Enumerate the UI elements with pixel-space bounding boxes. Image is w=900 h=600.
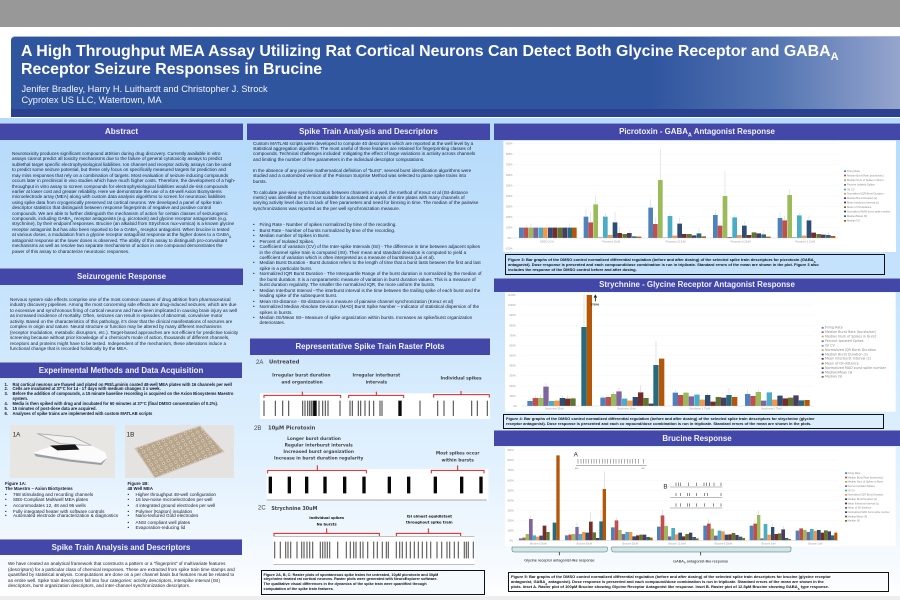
panel 2B: picrotoxin raster: Increased burst organization xyxy=(283,449,354,455)
caption: figure 5: Figure 5: Bar graphs of the DMSO control normalized differential regulation (before and after dosing) of the selected spike train descriptors for brucine (glycine receptor xyxy=(511,574,831,579)
legend: strychnine: Mean Interburst Interval (s) xyxy=(825,357,871,361)
chart: strychnine bars: 500% xyxy=(509,355,516,358)
panel 2A: untreated raster: and organization xyxy=(281,380,323,386)
chart: picrotoxin bars: 300% xyxy=(506,205,513,208)
text: figure 1A description xyxy=(5,480,118,518)
inset B raster xyxy=(663,483,722,508)
heading: brucine: Brucine Response xyxy=(662,434,732,443)
legend: brucine: Median Num of Spikes in Burst xyxy=(848,480,883,484)
caption: figure 3: antagonist). Dose response is presented and each compound/dose combination is run in triplicate. Standard errors of the mean are shown in the plot. Figure 3 also xyxy=(508,262,819,266)
legend: brucine: Mean of ISI-distance xyxy=(848,506,872,510)
legend: brucine: Median Burst Rate (bursts/sec) xyxy=(848,475,883,479)
text: abstract: using spike data from cryogenically preserved rat cortical neurons. We developed a panel of spike train xyxy=(12,200,222,205)
legend: brucine: ISI CV xyxy=(848,488,855,492)
text: descriptor definitions: • xyxy=(253,260,255,265)
legend: brucine xyxy=(845,471,890,523)
panel 2C: strychnine raster: ISI almost equidistant xyxy=(407,514,452,518)
legend: strychnine: Median ISI xyxy=(825,375,842,379)
text: descriptor definitions: varying activity level due to its lack of free parameters and need for binning in time. The median of the pairwise xyxy=(253,200,478,205)
chart: brucine bars: 900% xyxy=(507,449,514,452)
legend: picrotoxin: Mean Interburst Interval (s) xyxy=(847,200,879,204)
list: methods steps: 4. xyxy=(4,401,8,406)
chart: brucine bars: 500% xyxy=(507,489,514,492)
text: descriptor definitions: studied and a customized version of the Poisson Surprise Method was selected to parse spike trains into xyxy=(253,173,466,178)
text: descriptor definitions: leading spike of the subsequent burst. xyxy=(260,293,337,298)
list: methods steps: Cells are incubated at 37°C for 14 - 17 days with medium changes 3 x week. xyxy=(12,386,161,391)
text: figure 1A description: Fully integrated heater with software controls xyxy=(13,508,104,514)
panel 2A: untreated raster: Irregular burst duration xyxy=(272,373,331,379)
chart: strychnine bars: 200% xyxy=(509,385,516,388)
chart: strychnine bars: 800% xyxy=(509,324,516,327)
text: descriptor definitions: the burst duration. It is a nonparametric measure of variation in burst duration values. This is a measure of xyxy=(260,277,476,282)
legend: brucine: Normalized MAD burst spike number xyxy=(848,510,890,514)
text: figure 1B description: • xyxy=(128,525,129,530)
text: descriptor definitions: Coefficient of variation (CV) of the Inter-spike Intervals (ISI) - The difference in time between adjacent spikes xyxy=(260,244,480,249)
text: descriptor definitions: • xyxy=(253,222,255,227)
text: descriptor definitions: burst duration regularity. The smaller the normalized IQR, the more uniform the bursts. xyxy=(260,282,435,287)
text: descriptor definitions: • xyxy=(253,244,255,249)
text: descriptor definitions: Median number of Spikes in Burst. xyxy=(260,233,330,238)
chart: strychnine bars: Strychnine 0.75uM xyxy=(761,408,782,411)
legend: strychnine: Normalized IQR Burst Duration xyxy=(825,348,876,352)
text: descriptor definitions: Mean ISI-distance - ISI-distance is a measure of pairwise channel synchronization (Kreuz et al) xyxy=(260,299,453,304)
text: descriptor definitions: in the channel spike train is computed (ISI). Their mean and standard deviation is computed to yield a xyxy=(260,250,466,255)
text: descriptor definitions: • xyxy=(253,315,255,320)
text: abstract: antagonist response at the lower doses is observed. The ability of this assay to distinguish pro-convulsant xyxy=(12,238,227,243)
legend: strychnine: Firing Rate xyxy=(825,326,843,330)
text: figure 1B description: ANSI compliant well plates xyxy=(136,520,190,524)
text: abstract: compounds, including GABAA receptor antagonists (e.g. picrotoxin) and glycine receptor antagonists (e.g. xyxy=(12,216,227,223)
chart: brucine bars: 300% xyxy=(507,509,514,512)
poster title: Receptor Seizure Responses in Brucine xyxy=(21,61,322,78)
chart: brucine bars: Brucine 25uM xyxy=(623,542,638,545)
top grey band xyxy=(0,0,900,27)
heading: spike train analysis middle xyxy=(247,124,490,140)
background: light blue gradient xyxy=(0,118,900,596)
text: figure 1B description: 48 Well MEA xyxy=(128,486,153,490)
panel 2B: picrotoxin raster: Most spikes occur xyxy=(436,451,480,457)
text: descriptor definitions: spike in a particular burst. xyxy=(260,266,312,271)
text: descriptor definitions: deteriorates. xyxy=(260,320,285,325)
text: spike train analysis left: We have created an analytical framework that constructs a pattern or a "fingerprint" of multivariate features xyxy=(8,561,225,566)
legend: picrotoxin xyxy=(844,169,891,223)
text: figure 1B description: • xyxy=(128,508,129,514)
text: figure 1B description: 4 integrated ground electrodes per well xyxy=(136,502,215,508)
caption: figure 2: The qualitative visual differences in the dynamics of the spike train were quantified through xyxy=(264,582,427,586)
chart: strychnine bars: 1000% xyxy=(508,304,517,307)
text: figure 1B description: Figure 1B: xyxy=(128,480,149,486)
text: figure 1A description: • xyxy=(5,497,7,502)
legend: strychnine: Percent Isolated Spikes xyxy=(825,339,864,343)
text: seizurogenic response: (receptor modulation, metabolic disruptors, etc.). Target-based approaches are not efficient for predictive toxicity xyxy=(10,330,238,335)
chart: picrotoxin bars: 600% xyxy=(506,174,513,177)
heading: strychnine xyxy=(494,279,900,292)
image: 48 well MEA plate 1B: 1B xyxy=(127,432,134,439)
heading: picrotoxin xyxy=(494,124,900,140)
text: descriptor definitions: coefficient of variation which is often interpreted as a measure of burstiness (Lai et al). xyxy=(260,255,435,260)
text: figure 1A description: Accommodates 12, 48 and 96 wells xyxy=(13,502,86,508)
inset A raster: 420 xyxy=(641,468,646,470)
caption: figure 2: strychnine treated rat cortical neurons. Raster plots were generated with NeuroExplorer software. xyxy=(264,577,438,581)
caption: figure 4: Figure 4: Bar graphs of the DMSO control normalized differential regulation (before and after dosing) of the selected spike train descriptors for strychnine (glycine xyxy=(506,416,814,421)
caption: figure 2: computation of the spike train features. xyxy=(264,587,334,591)
legend: strychnine: Median Burst Rate (bursts/sec) xyxy=(825,330,877,334)
text: figure 1A description: • xyxy=(5,502,7,508)
text: seizurogenic response: activity. Based on the characteristics of this pathology, it's clear that the clinical manifestations of seizures are xyxy=(10,319,232,324)
caption: figure 5: antagonist, GABAA antagonist). Dose response is presented and each compound/dose combination is run in triplicate. Standard errors of the mean are shown in the xyxy=(511,579,824,586)
chart: brucine bars: 700% xyxy=(507,469,514,472)
legend: picrotoxin: Median Burst Rate (bursts/sec) xyxy=(847,173,884,177)
caption: figure 2: Figure 2A, B, C: Raster plots of spontaneous spike trains for untreated, 10µM picrotoxin and 30µM xyxy=(264,572,438,576)
text: abstract: earlier at lower cost and greater reliability. Here we demonstrate the use of a 48-well Axion BioSystems xyxy=(12,189,222,194)
chart: brucine bars: 400% xyxy=(507,499,514,502)
text: seizurogenic response: industry discovery pipelines. Among the most concerning side effects are drug-induced seizures, which are due xyxy=(10,302,236,307)
chart: brucine bars: Brucine 6.25uM xyxy=(715,542,732,545)
caption: figure 5: plots. Inset A. Raster plot of 100µM Brucine showing Glycine Receptor Antagonist like response. Inset B. Raster plot of 12.5µM Brucine showing GABAA type response. xyxy=(511,584,829,591)
panel 2A: untreated raster xyxy=(256,360,490,419)
image: 48 well MEA plate 1B xyxy=(125,425,234,478)
title banner xyxy=(11,36,900,116)
heading: picrotoxin: Picrotoxin - GABAA Antagonist Response xyxy=(619,127,775,139)
legend: picrotoxin: ISI CV xyxy=(847,187,855,191)
panel 2B: picrotoxin raster: Increase in burst duration regularity xyxy=(274,456,363,462)
legend: picrotoxin: Firing Rate xyxy=(847,169,861,173)
text: descriptor definitions xyxy=(253,140,482,325)
legend: picrotoxin: Median ISI xyxy=(847,219,860,223)
chart: picrotoxin bars: 500% xyxy=(506,184,513,187)
poster title: A High Throughput MEA Assay Utilizing Rat Cortical Neurons Can Detect Both Glycine Receptor and GABAA xyxy=(21,42,839,63)
legend: picrotoxin: Percent Isolated Spikes xyxy=(847,183,876,187)
chart: picrotoxin bars: Picrotoxin 12.5uM xyxy=(666,240,686,243)
text: descriptor definitions: Percent of Isolated Spikes. xyxy=(260,239,314,244)
list: methods steps: 6. xyxy=(4,411,8,416)
text: seizurogenic response: as increased incidence of mortality. Often, seizures can result in episodes of abnormal, convulsive motor xyxy=(10,313,223,318)
text: figure 1B description: Nano-textured Gold electrodes xyxy=(136,513,198,518)
panel 2C: strychnine raster: 2C xyxy=(258,506,266,512)
heading: strychnine: Strychnine - Glycine Receptor Antagonist Response xyxy=(599,280,795,289)
list: methods steps: 1. xyxy=(4,382,8,387)
legend: picrotoxin: Median Burst Duration (s) xyxy=(847,196,877,200)
legend: strychnine: Median/Mean ISI xyxy=(825,370,852,374)
text: figure 1A description: Figure 1A: xyxy=(5,480,26,486)
legend: brucine: Median Burst Duration (s) xyxy=(848,497,877,501)
list: methods steps: Analyses of spike trains are implemented with custom MATLAB scripts xyxy=(12,411,152,416)
panel 2B: picrotoxin raster: 2B xyxy=(254,426,261,432)
legend: brucine: Median ISI xyxy=(848,519,860,523)
text: abstract: descriptor statistics that distinguish between response fingerprints of negative and positive control xyxy=(12,205,211,210)
list: methods steps: Rat cortical neurons are thawed and plated on PEI/Laminin coated 48-well MEA plates with 16 channels per well xyxy=(12,382,232,387)
text: descriptor definitions: To calculate pair-wise synchronization between channels in a well, the method of Kreuz et al (ISI-distance xyxy=(253,190,468,195)
legend: picrotoxin: Mean of ISI-distance xyxy=(847,205,872,209)
list: methods steps: 15 minutes of post-dose data are acquired. xyxy=(12,406,97,411)
authors and affiliation: Jenifer Bradley, Harry H. Luithardt and Christopher J. Strock xyxy=(22,84,268,94)
list: methods steps: Media is then spiked with drug and incubated for 60 minutes at 37°C (final DMSO concentration of 0.2%). xyxy=(12,401,218,406)
heading: abstract: Abstract xyxy=(105,127,138,136)
chart: strychnine bars: 900% xyxy=(509,314,516,317)
text: figure 1B description: • xyxy=(128,513,129,518)
chart: strychnine bars: 100% xyxy=(509,395,516,398)
text: figure 1A description: The Maestro – Axion BioSystems xyxy=(5,486,73,490)
text: figure 1B description: • xyxy=(128,502,129,508)
panel 2C: strychnine raster: Individual spikes xyxy=(309,516,344,520)
text: descriptor definitions: Firing Rate - Number of spikes normalized by time of the recording. xyxy=(260,222,397,227)
text: descriptor definitions: and limiting the number of free parameters in the individual descriptor computations. xyxy=(253,157,424,162)
chart: strychnine bars: 1100% xyxy=(508,294,516,297)
text: descriptor definitions: bursts. xyxy=(253,179,267,184)
text: abstract: sublethal target specific electrophysiological liabilities. Ion channel and receptor activity assays can be used xyxy=(12,162,231,167)
heading: raster plots: Representative Spike Train Raster Plots xyxy=(295,342,445,351)
text: descriptor definitions: compounds. Technical challenges included: mitigating the effect of large variations in activity across channels xyxy=(253,151,475,156)
chart: picrotoxin bars: 0% xyxy=(507,237,512,240)
text: figure 1B description: • xyxy=(128,497,129,502)
brackets: response type groupings xyxy=(512,547,791,564)
text: spike train analysis left: descriptors, burst organization descriptors, and inter-channel synchronization descriptors. xyxy=(8,583,190,588)
chart: brucine bars: 100% xyxy=(507,529,514,532)
banner bottom strip xyxy=(11,108,900,116)
text: descriptor definitions: In the absence of any precise mathematical definition of "burst", several burst identification algorithms were xyxy=(253,168,471,173)
brackets: response type groupings: GABA xyxy=(673,560,684,564)
heading: experimental methods: Experimental Methods and Data Acquisition xyxy=(39,366,203,375)
heading: abstract xyxy=(0,124,243,140)
chart: picrotoxin bars: 200% xyxy=(506,216,513,219)
panel 2A: untreated raster: 2A xyxy=(256,360,263,366)
chart: picrotoxin bars: 100% xyxy=(506,226,513,229)
list: methods steps: 2. xyxy=(4,386,8,391)
text: abstract: throughput in vitro assay to screen compounds for electrophysiological liabilities would de-risk compounds xyxy=(12,184,228,189)
chart: strychnine bars: 300% xyxy=(509,375,516,378)
caption: figure 3: includes the response of the DMSO control before and after dosing. xyxy=(508,266,637,272)
chart: strychnine bars: 400% xyxy=(509,365,516,368)
heading: raster plots xyxy=(250,339,490,355)
text: seizurogenic response: functional change that is recorded holistically by the MEA. xyxy=(10,346,128,351)
chart: strychnine bars: 0% xyxy=(513,405,518,408)
text: spike train analysis left: (descriptors) for a particular class of chemical responses. These are extracted from spike train time stamps and xyxy=(8,567,235,572)
heading: spike train analysis left xyxy=(0,540,242,555)
chart: brucine bars: 800% xyxy=(507,459,514,462)
legend: brucine: Mean Interburst Interval (s) xyxy=(848,501,879,505)
authors and affiliation xyxy=(22,84,268,105)
legend: picrotoxin: Median Num of Spikes in Burst xyxy=(847,178,884,182)
text: descriptor definitions: spikes in bursts. xyxy=(260,310,293,315)
chart: strychnine bars: Strychnine 30uM xyxy=(545,408,564,411)
heading: brucine xyxy=(494,431,900,446)
legend: strychnine: ISI CV xyxy=(825,344,835,348)
text: seizurogenic response: Nervous system side effects comprise one of the most common causes of drug attrition from pharmaceutical xyxy=(10,297,230,302)
text: abstract: receptor antagonist but has also been reported to be a GABAA receptor antagonist. When brucine is tested xyxy=(12,227,229,234)
caption: figure 3: Figure 3: Bar graphs of the DMSO control normalized differential regulation (before and after dosing) of the selected spike train descriptors for picrotoxin (GABAA xyxy=(508,256,816,263)
panel 2A: untreated raster: Individual spikes xyxy=(440,376,482,382)
text: seizurogenic response: screening because without prior knowledge of a chemical's mode of action, thousands of different channels, xyxy=(10,335,229,340)
chart: picrotoxin bars: 900% xyxy=(506,142,513,145)
image: Maestro device 1A: 1A xyxy=(13,431,21,438)
text: figure 1B description: Evaporation-reducing lid xyxy=(136,525,185,530)
legend: picrotoxin: Median/Mean ISI xyxy=(847,214,867,218)
panel 2A: untreated raster: Irregular interburst xyxy=(352,373,400,379)
chart: picrotoxin bars: DMSO 0.1% xyxy=(540,240,555,243)
authors and affiliation: Cyprotex US LLC, Watertown, MA xyxy=(22,95,162,105)
text: spike train analysis left xyxy=(8,561,235,588)
text: abstract: assays cannot predict all toxicity mechanisms due to the failure of general cytotoxicity assays to predict xyxy=(12,156,222,161)
chart: strychnine bars: 600% xyxy=(509,344,516,347)
list: methods steps xyxy=(4,382,234,416)
legend: strychnine: Normalized MAD burst spike number xyxy=(825,366,887,370)
legend: picrotoxin: Normalized MAD burst spike number xyxy=(847,209,891,213)
panel 2C: strychnine raster xyxy=(258,506,474,564)
chart: brucine bars: Brucine 50uM xyxy=(577,542,592,545)
text: seizurogenic response: receptors and proteins might have to be tested. Independent of the mechanism, these alterations induce a xyxy=(10,341,226,346)
caption: figure 5 xyxy=(508,572,889,592)
chart: strychnine bars: 700% xyxy=(509,334,516,337)
panel 2A: untreated raster: intervals xyxy=(366,380,388,386)
text: abstract: may miss responses that rely on a combination of targets. Most evaluation of seizure inducing compounds xyxy=(12,173,228,178)
text: descriptor definitions: • xyxy=(253,299,255,304)
legend: strychnine: Median Burst Duration (s) xyxy=(825,352,869,356)
panel 2A: untreated raster: Untreated xyxy=(269,360,300,366)
text: abstract: to predict some seizure potential, but these only focus on specifically measured targets for prediction and xyxy=(12,167,226,172)
image: Maestro device 1A xyxy=(10,425,115,478)
text: abstract xyxy=(12,151,236,254)
inset B raster: B xyxy=(663,484,668,491)
text: figure 1A description: • xyxy=(5,508,7,514)
caption: figure 4: receptor antagonist). Dose response is presented and each co mpound/dose combination is run in triplicate. Standard errors of the mean are shown in the plots. xyxy=(506,421,811,426)
text: abstract: mechanisms as well as resolve two separate mechanisms of action in one compound demonstrates the xyxy=(12,243,223,248)
text: seizurogenic response: to excessive and synchronous firing of cortical neurons and have been implicated in causing brain injury as well xyxy=(10,308,237,313)
panel 2C: strychnine raster: No bursts xyxy=(317,522,337,526)
panel 2C: strychnine raster: throughout spike train xyxy=(406,521,453,525)
poster title xyxy=(21,42,839,78)
text: abstract: occurs later in preclinical in vivo studies which have much higher costs. Therefore, the development of a high- xyxy=(12,178,235,183)
chart: brucine bars: 0% xyxy=(509,539,514,542)
legend: brucine: Normalized IQR Burst Duration xyxy=(848,493,884,497)
legend: picrotoxin: Normalized IQR Burst Duration xyxy=(847,192,884,196)
text: abstract: strychnine), by their endpoint responses. Brucine (an alkaloid from Strychnos nux-vomica) is a known glycine xyxy=(12,221,234,226)
heading: experimental methods xyxy=(0,363,242,378)
list: methods steps: 3. xyxy=(4,391,8,396)
chart: picrotoxin bars: 800% xyxy=(506,153,513,156)
text: abstract: microelectrode array (MEA) along with custom data analysis algorithms to screen for neurotoxic liabilities xyxy=(12,194,225,199)
list: methods steps: Before the addition of compounds, a 15 minute baseline recording is acquired on the Axion Biosystems Maestro xyxy=(12,391,233,396)
text: descriptor definitions: Median ISI/Mean ISI– Measure of spike organization within bursts. Increases as spike/burst organization xyxy=(260,315,472,320)
panel 2B: picrotoxin raster: Longer burst duration xyxy=(287,436,341,442)
chart: picrotoxin bars: -100% xyxy=(505,248,513,251)
text: descriptor definitions: • xyxy=(253,228,255,233)
brackets: response type groupings: Glycine receptor antagonist-like response xyxy=(524,559,595,563)
text: descriptor definitions: • xyxy=(253,233,255,238)
text: figure 1A description: Automated electrode characterization & diagnostics xyxy=(13,513,118,518)
chart: brucine bars: Brucine 3uM xyxy=(762,542,776,545)
chart: strychnine bars: Strychnine 10uM xyxy=(617,408,636,411)
text: figure 1B description: • xyxy=(128,492,129,497)
heading: seizurogenic response xyxy=(0,269,243,285)
chart: picrotoxin bars: Picrotoxin 25uM xyxy=(602,240,620,243)
text: descriptor definitions: Custom MATLAB scripts were developed to compute 40 descriptors which are reported at the well level by a xyxy=(253,140,473,146)
list: methods steps: system. xyxy=(12,396,28,401)
legend: strychnine: Median Num of Spikes in Burst xyxy=(825,334,877,338)
chart: picrotoxin bars: 700% xyxy=(506,163,513,166)
legend: brucine: Percent Isolated Spikes xyxy=(848,484,875,488)
text: abstract: power of this assay to characterize neurotoxic responses. xyxy=(12,249,129,254)
chart: strychnine bars: Strychnine 3.75uM xyxy=(689,408,710,411)
bottom grey strip xyxy=(0,596,900,600)
chart: brucine bars: Brucine 12.5uM xyxy=(668,542,686,545)
text: seizurogenic response: complex in origin and nature. Neural structure or function may be altered by many different mechanisms xyxy=(10,324,222,329)
text: descriptor definitions: statistical aggregation algorithm. The most useful of these features are retained for fingerprinting classes of xyxy=(253,146,471,151)
text: descriptor definitions: Burst Rate - Number of bursts normalized by time of the recording. xyxy=(260,228,395,233)
text: descriptor definitions: • xyxy=(253,239,255,244)
list: methods steps: 5. xyxy=(4,406,8,411)
chart: brucine bars: Brucine 100uM xyxy=(530,542,547,545)
text: abstract: compounds. We are able to further distinguish the mechanism of action for certain classes of seizurogenic xyxy=(12,211,228,216)
text: figure 1A description: SBS-Compliant Multiwell MEA plates xyxy=(13,497,88,502)
legend: brucine: Firing Rate xyxy=(848,471,861,475)
text: descriptor definitions: Median Burst Duration - Burst duration refers to the length of time that a burst lasts between the first and last xyxy=(260,260,481,265)
text: figure 1B description: Polymer (Kapton) insulation xyxy=(136,508,192,514)
text: descriptor definitions: synchronizations was reported as the per well synchronization measure. xyxy=(253,206,400,211)
chart: picrotoxin bars: 400% xyxy=(506,195,513,198)
inset A raster: A xyxy=(574,452,579,459)
text: descriptor definitions: metric) was identified as the most suitable for automated analysis of entire plates with many channels of xyxy=(253,195,465,200)
text: descriptor definitions: • xyxy=(253,304,255,309)
chart: picrotoxin bars: Picrotoxin 6.25uM xyxy=(731,240,751,243)
legend: strychnine xyxy=(822,326,887,379)
text: spike train analysis left: quantified by statistical analysis. Computations are done on a per channel basis but features must be related to xyxy=(8,572,234,577)
legend: strychnine: Mean of ISI-distance xyxy=(825,361,859,365)
text: descriptor definitions: Normalized Median Absolute Deviation (MAD) Burst Spike Number – Indicator of statistical dispersion of the xyxy=(260,304,479,309)
panel 2B: picrotoxin raster: 10µM Picrotoxin xyxy=(268,425,316,431)
text: abstract: at various doses, a modulation from a glycine receptor antagonist response at the higher doses to a GABAA xyxy=(12,232,231,239)
text: abstract: Neurotoxicity produces significant compound attrition during drug discovery. Currently available in vitro xyxy=(12,151,220,156)
text: seizurogenic response xyxy=(10,297,238,351)
caption: figure 3 xyxy=(505,254,885,274)
text: figure 1B description: Higher throughput 48-well configuration xyxy=(136,492,216,497)
chart: brucine bars: 200% xyxy=(507,519,514,522)
legend: brucine: Median/Mean ISI xyxy=(848,514,867,518)
text: figure 1B description: 16 low-noise microelectrodes per well xyxy=(136,497,212,502)
text: descriptor definitions: Median Interburst Interval –The interburst interval is the time between the trailing spike of each burst and the xyxy=(260,288,480,293)
text: figure 1B description xyxy=(128,480,216,530)
panel 2B: picrotoxin raster: within bursts xyxy=(442,458,474,464)
heading: spike train analysis left: Spike Train Analysis and Descriptors xyxy=(52,543,190,552)
text: spike train analysis left: an entire well. Spike train descriptors fall into four categories: activity descriptors, interspike interval (ISI) xyxy=(8,578,220,583)
caption: figure 2 xyxy=(260,570,484,594)
chart: strychnine bars: 3700% xyxy=(591,303,600,307)
inset A raster xyxy=(574,452,647,470)
chart: brucine bars: Brucine 1uM xyxy=(808,542,822,545)
text: descriptor definitions: Normalized IQR Burst Duration - The Interquartile Range of the burst duration is normalized by the median of xyxy=(260,271,482,276)
chart: picrotoxin bars: Picrotoxin 3.13uM xyxy=(795,240,815,243)
text: figure 1A description: • xyxy=(5,513,7,518)
inset A raster: 400 xyxy=(575,468,579,470)
text: figure 1A description: • xyxy=(5,492,7,497)
panel 2B: picrotoxin raster xyxy=(254,425,488,501)
text: descriptor definitions: • xyxy=(253,271,255,276)
text: figure 1A description: 768 stimulating and recording channels xyxy=(13,492,93,497)
caption: figure 4 xyxy=(503,414,884,428)
text: descriptor definitions: • xyxy=(253,288,255,293)
brackets: response type groupings: antagonist-like response xyxy=(686,560,728,564)
text: figure 1B description: • xyxy=(128,520,129,524)
brackets: response type groupings: A xyxy=(684,560,686,564)
panel 2C: strychnine raster: Strychnine 30uM xyxy=(271,506,318,512)
chart: brucine bars: 600% xyxy=(507,479,514,482)
panel 2B: picrotoxin raster: Regular interburst intervals xyxy=(285,443,353,449)
heading: seizurogenic response: Seizurogenic Response xyxy=(77,272,166,281)
heading: spike train analysis middle: Spike Train Analysis and Descriptors xyxy=(299,127,438,136)
